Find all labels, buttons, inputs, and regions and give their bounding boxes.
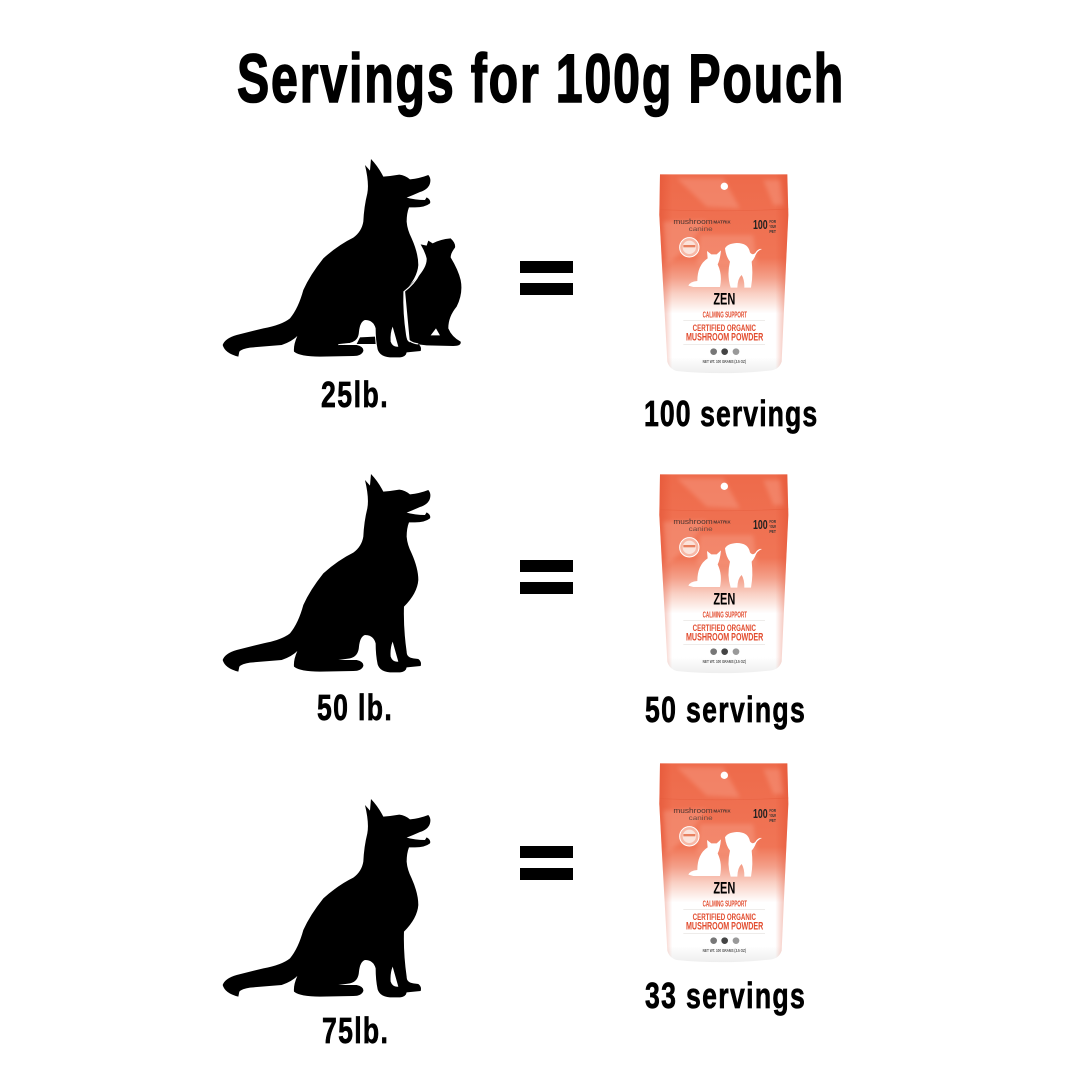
net weight: NET WT. 100 GRAMS (3.5 OZ) [703,359,746,365]
pouch 2: YOUR [769,524,776,529]
benefit: CALMING SUPPORT [703,311,747,320]
equals sign 1 [520,261,573,295]
servings label: 33 servings: 33 servings [645,975,805,1016]
pouch highlights [663,178,783,265]
pouch 1 [659,174,788,373]
certification badges [710,348,717,355]
pouch 2: PET [769,529,776,534]
benefit: CALMING SUPPORT [703,611,747,620]
pouch 2: MATRIX [713,520,731,526]
pouch 3: MUSHROOM POWDER [686,921,764,933]
brand: mushroom [673,517,713,526]
human grade seal [680,827,699,846]
hang hole [721,772,728,779]
human grade seal [680,238,699,257]
certification badges [710,937,717,944]
equals sign 2 [520,560,573,594]
weight label: 75lb.: 75lb. [322,1010,388,1051]
pouch highlights [663,767,783,854]
pouch highlights [663,478,783,565]
variant name: ZEN [713,879,735,898]
hang hole [721,183,728,190]
cat and puppy icon [688,832,762,877]
equals sign 3 [520,846,573,880]
pouch body [659,474,788,673]
weight label: 50 lb.: 50 lb. [317,687,392,728]
human grade seal [680,538,699,557]
brand: mushroom [673,806,713,815]
net weight: NET WT. 100 GRAMS (3.5 OZ) [703,948,746,954]
certification badges [710,648,717,655]
pouch 3: YOUR [769,813,776,818]
benefit: CALMING SUPPORT [703,900,747,909]
pouch 3: FOR [769,808,776,813]
hang hole [721,483,728,490]
pouch 2: canine [689,526,713,533]
serving count: 100 [753,218,768,232]
title: Servings for 100g Pouch [237,39,843,117]
brand: mushroom [673,217,713,226]
white outline between dog and cat [404,274,419,344]
icon: dog silhouette [223,159,430,357]
net weight: NET WT. 100 GRAMS (3.5 OZ) [703,659,746,665]
pouch body [659,174,788,373]
row 1: dog and cat silhouette [223,159,461,357]
product type: CERTIFIED ORGANIC [693,912,756,922]
row 2: dog silhouette [223,474,430,672]
variant name: ZEN [713,290,735,309]
icon: cat silhouette [405,238,461,346]
pouch 2: MUSHROOM POWDER [686,632,764,644]
pouch 2: FOR [769,519,776,524]
row 3: dog silhouette [223,799,430,997]
pouch 2 [659,474,788,673]
cat and puppy icon [688,243,762,288]
pouch body [659,763,788,962]
pouch 1: MUSHROOM POWDER [686,332,764,344]
pouch 3: PET [769,818,776,823]
servings label: 100 servings: 100 servings [644,393,817,434]
product type: CERTIFIED ORGANIC [693,623,756,633]
pouch 3 [659,763,788,962]
pouch 1: MATRIX [713,220,731,226]
cat and puppy icon [688,543,762,588]
divider [683,320,765,344]
pouch 1: canine [689,226,713,233]
pouch 1: YOUR [769,224,776,229]
variant name: ZEN [713,590,735,609]
pouch 1: PET [769,229,776,234]
pouch 1: FOR [769,219,776,224]
divider [683,909,765,933]
pouch 3: canine [689,815,713,822]
servings label: 50 servings: 50 servings [645,689,805,730]
serving count: 100 [753,518,768,532]
weight label: 25lb.: 25lb. [321,374,388,415]
serving count: 100 [753,807,768,821]
pouch 3: MATRIX [713,809,731,815]
product type: CERTIFIED ORGANIC [693,323,756,333]
divider [683,620,765,644]
